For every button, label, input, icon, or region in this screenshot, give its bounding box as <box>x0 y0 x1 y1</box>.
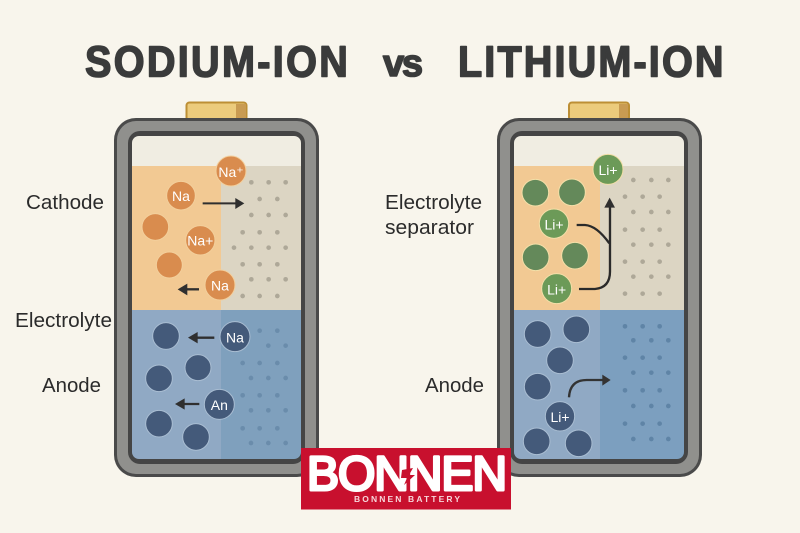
anode ions <box>146 322 250 450</box>
sodium ions: Na <box>172 188 190 204</box>
anode ions <box>523 316 592 457</box>
title: sodium-ion: SODIUM-ION <box>85 37 348 86</box>
anode ions: An <box>211 397 228 413</box>
label: anode right: Anode <box>425 375 484 397</box>
logo bolt <box>401 468 415 485</box>
cathode separator dots <box>623 178 671 296</box>
sodium ions: Na <box>211 277 229 293</box>
battery casing <box>114 118 319 477</box>
curved arrows cathode <box>577 198 615 289</box>
sodium ions: Na+ <box>187 233 213 249</box>
logo wordmark: BONNEN <box>307 448 507 501</box>
battery terminal <box>569 102 629 120</box>
anode ions: Na <box>226 329 244 345</box>
panel: lithium-ion battery <box>497 102 702 477</box>
arrows cathode <box>178 198 244 295</box>
battery terminal <box>186 102 246 120</box>
cathode separator dots <box>232 180 288 298</box>
lithium ions: Li+ <box>547 281 566 297</box>
curved arrow anode <box>569 375 611 397</box>
label: electrolyte separator: Electrolyte <box>385 192 482 214</box>
label: cathode: Cathode <box>26 192 104 214</box>
lithium ions: Li+ <box>544 216 564 232</box>
battery interior <box>514 136 684 460</box>
arrows anode <box>175 332 214 410</box>
lithium ions: Li+ <box>598 162 618 178</box>
anode dots <box>623 324 671 441</box>
anode dots <box>240 328 288 445</box>
sodium ions: Na⁺ <box>218 164 244 180</box>
label: anode left: Anode <box>42 375 101 397</box>
lithium ions <box>522 154 623 304</box>
label: electrolyte separator <box>385 192 482 239</box>
panel: sodium-ion battery <box>114 102 319 477</box>
logo tagline: BONNEN BATTERY <box>354 494 460 504</box>
label: electrolyte: Electrolyte <box>15 310 112 332</box>
logo: bonnen battery <box>301 448 511 510</box>
battery casing <box>497 118 702 477</box>
label: electrolyte separator: separator <box>385 217 474 239</box>
battery interior <box>132 136 301 460</box>
title: vs: vs <box>383 43 423 85</box>
anode ions: Li+ <box>550 409 570 425</box>
title: lithium-ion: LITHIUM-ION <box>458 37 724 86</box>
sodium ions <box>142 156 246 300</box>
